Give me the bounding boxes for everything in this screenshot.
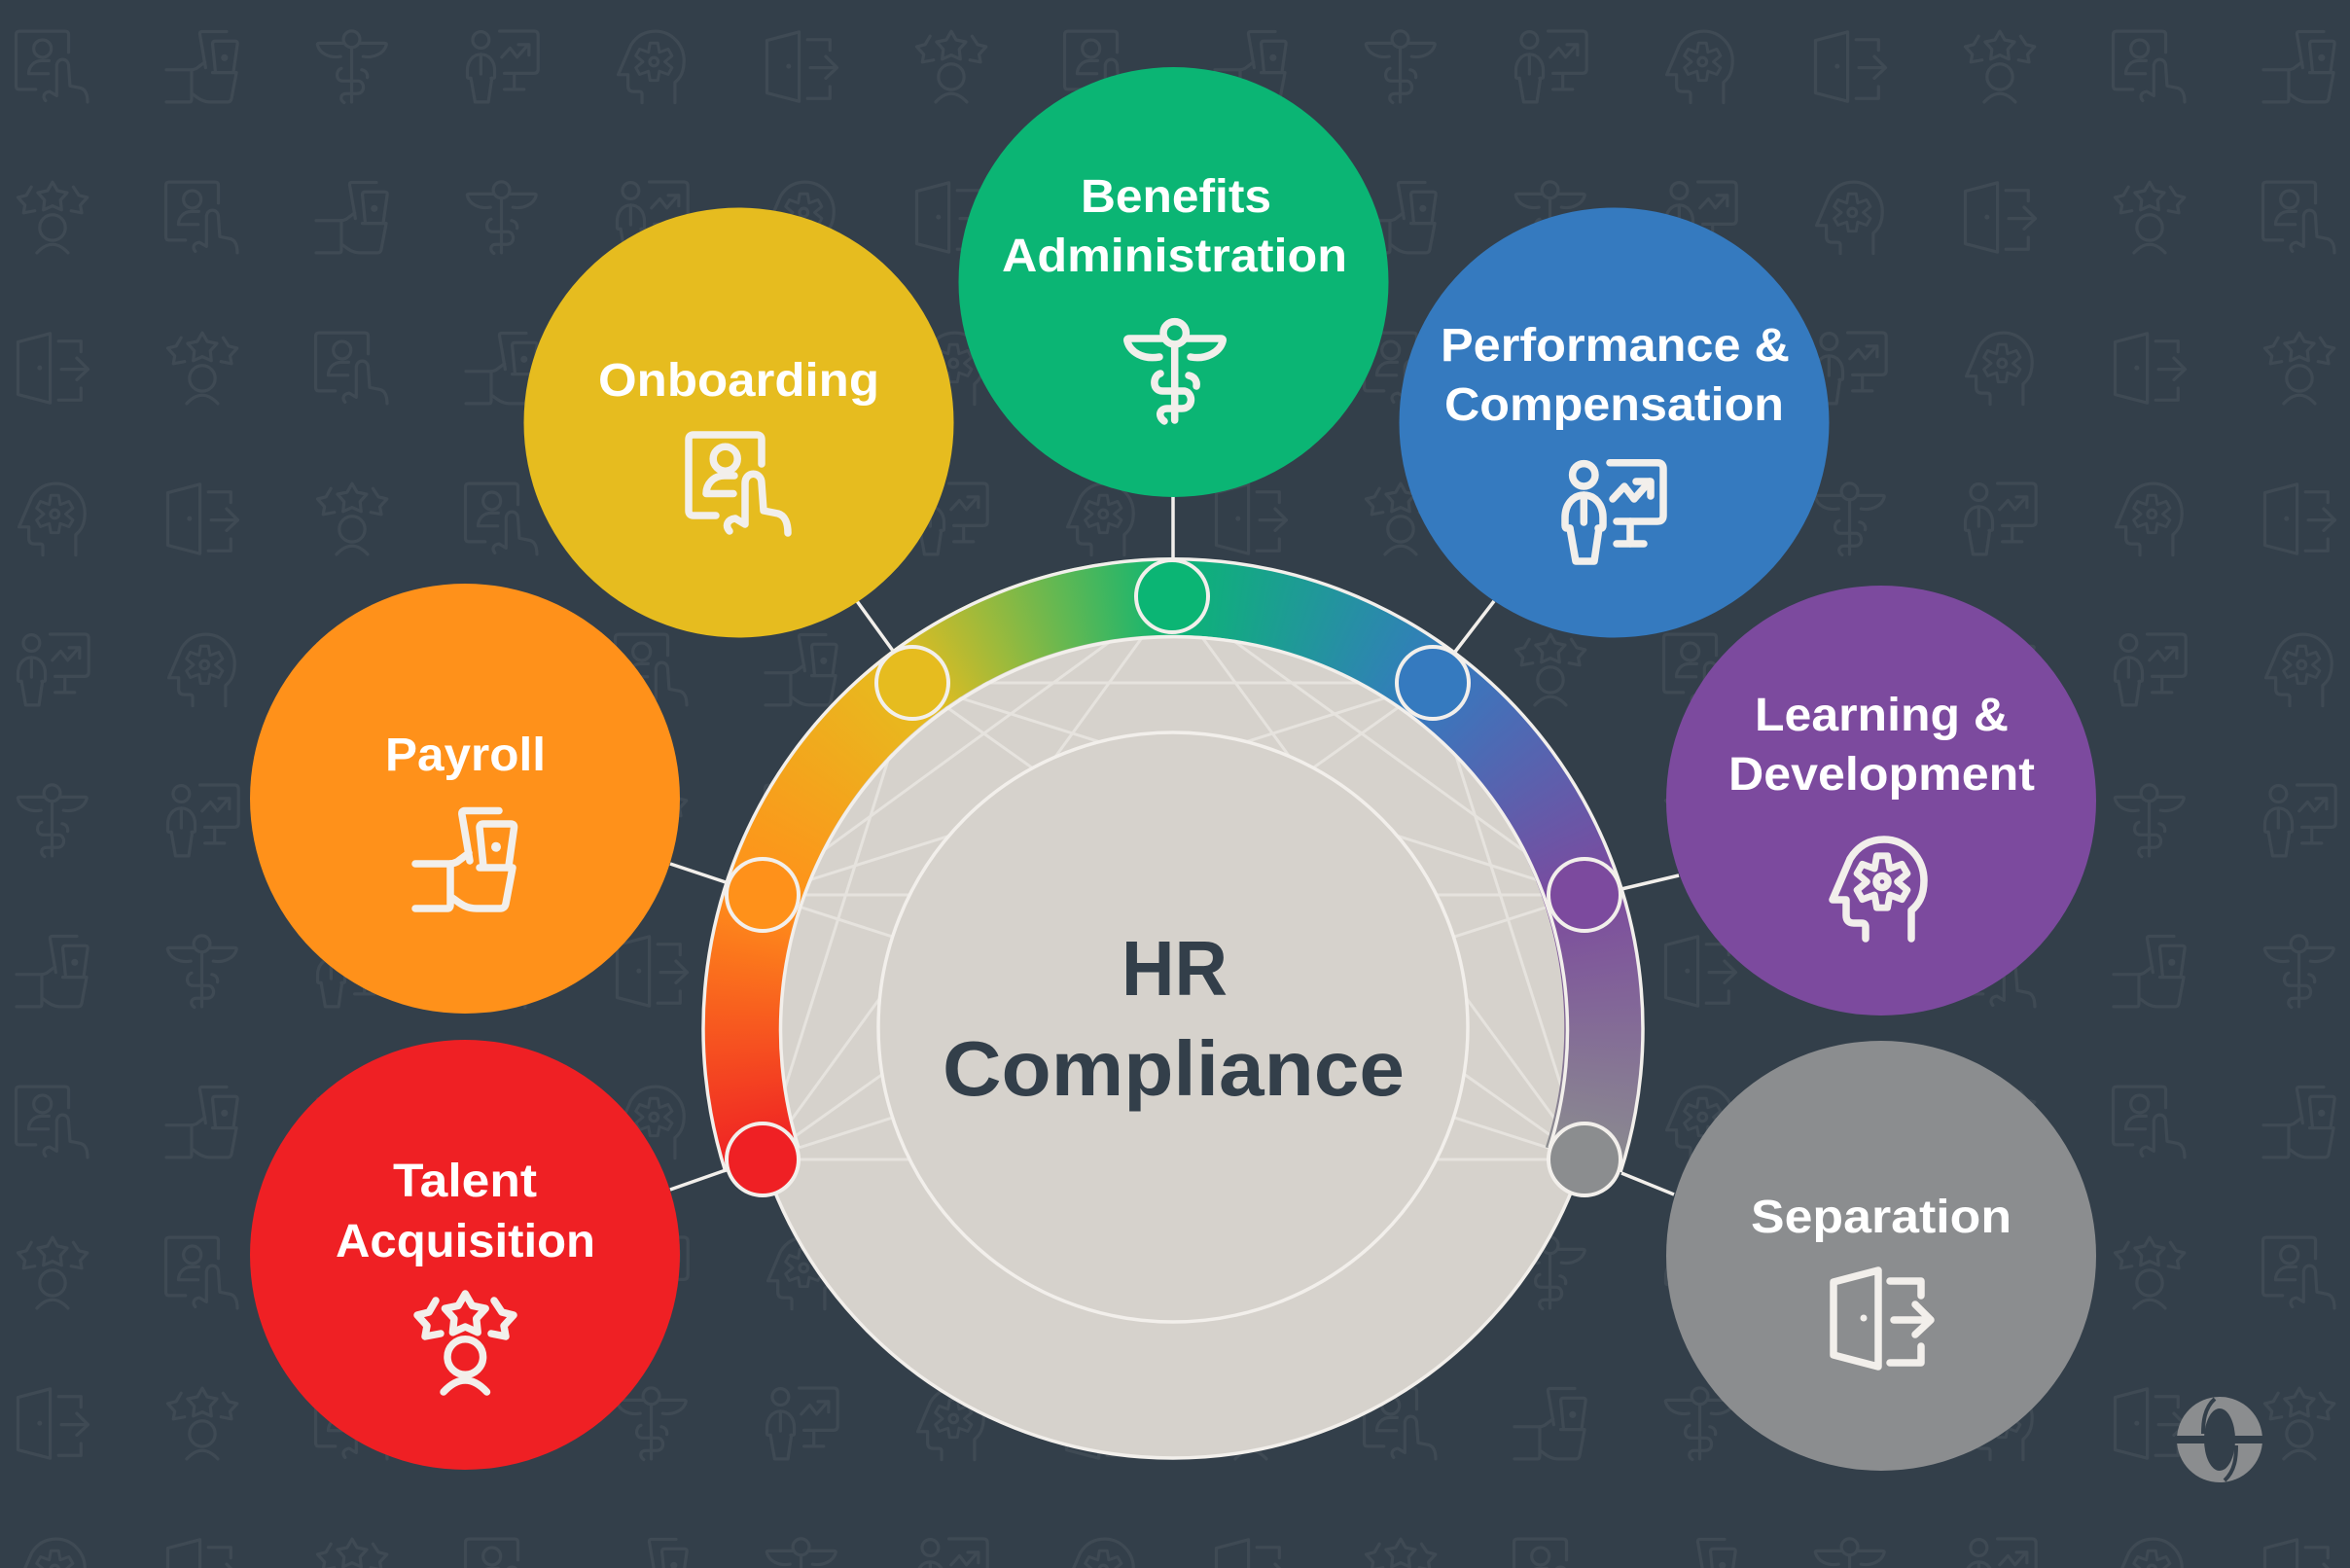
panel: Performance & Compensation bbox=[1399, 208, 1829, 638]
logo bbox=[2175, 1397, 2264, 1482]
label: Development: Development bbox=[1728, 749, 2035, 801]
icon: touch profile bbox=[689, 435, 788, 533]
label: Talent: Talent bbox=[393, 1156, 537, 1207]
panel: Benefits Administration bbox=[959, 67, 1389, 497]
panel: Learning & Development bbox=[1666, 586, 2096, 1016]
label: Benefits: Benefits bbox=[1081, 171, 1271, 223]
icon: hand with money bbox=[415, 811, 515, 909]
label: Payroll: Payroll bbox=[385, 730, 546, 781]
label: Compensation: Compensation bbox=[1444, 379, 1784, 431]
label: Onboarding: Onboarding bbox=[598, 355, 879, 407]
panel: Separation bbox=[1666, 1041, 2096, 1471]
label: Administration: Administration bbox=[1002, 231, 1347, 282]
label: Separation: Separation bbox=[1751, 1192, 2012, 1243]
panel: Onboarding bbox=[523, 208, 953, 638]
title: Compliance: Compliance bbox=[943, 1025, 1405, 1112]
icon: presenter with chart bbox=[1565, 463, 1663, 561]
icon: exit door bbox=[1834, 1270, 1931, 1367]
label: Acquisition: Acquisition bbox=[336, 1216, 595, 1267]
label: Performance &: Performance & bbox=[1441, 320, 1790, 372]
inner circle with title bbox=[878, 732, 1468, 1322]
panel: Payroll bbox=[250, 584, 680, 1014]
icon: person with stars bbox=[417, 1294, 514, 1392]
panel: Talent Acquisition bbox=[250, 1040, 680, 1470]
icon: caduceus bbox=[1127, 322, 1223, 421]
icon: head with gear bbox=[1833, 839, 1924, 939]
ring nodes bbox=[727, 560, 1620, 1195]
label: Learning &: Learning & bbox=[1755, 690, 2009, 741]
gradient ring bbox=[704, 558, 1642, 1165]
title: HR: HR bbox=[1122, 925, 1228, 1012]
